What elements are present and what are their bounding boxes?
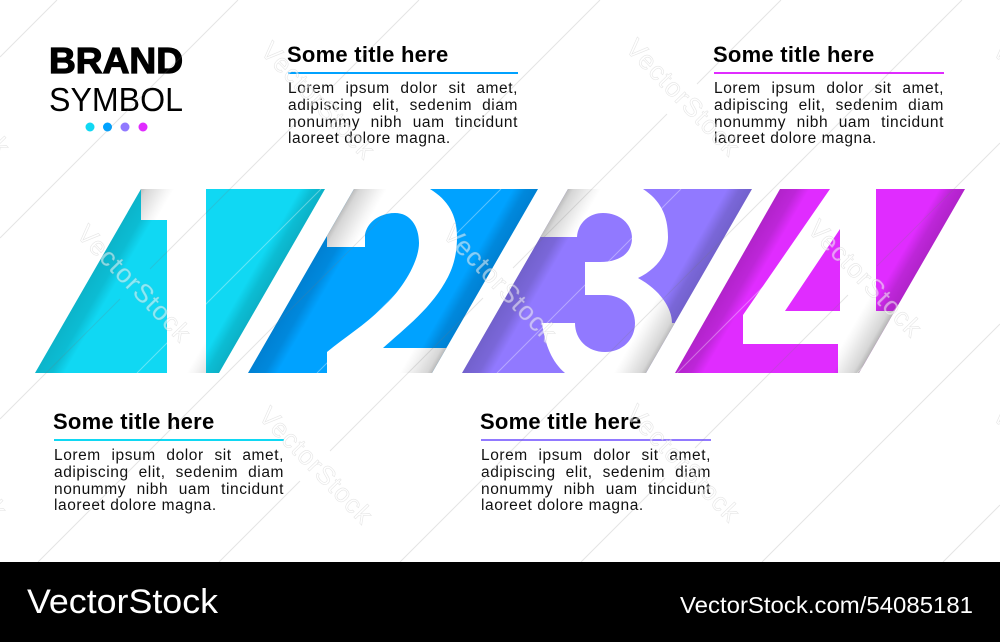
text block: top left: Lorem ipsum dolor sit amet,: [288, 80, 518, 97]
brand logo: [49, 40, 183, 132]
numbers graphic: [35, 189, 965, 373]
text block: bottom right: Some title here: [480, 409, 641, 434]
watermark overlay: VectorStock: [620, 399, 747, 528]
watermark overlay: VectorStock: [620, 33, 747, 162]
footer bar: [0, 562, 1000, 642]
brand logo: BRAND: [49, 40, 183, 81]
panel: number 2: [248, 189, 538, 373]
panel: number 1: [35, 189, 325, 373]
text block: bottom left: laoreet dolore magna.: [54, 497, 217, 514]
text block: top right: [713, 42, 944, 147]
brand logo: SYMBOL: [49, 81, 183, 118]
text block: top right: Some title here: [713, 42, 874, 67]
text block: top left: [287, 42, 518, 147]
footer bar: VectorStock.com/54085181: [680, 592, 973, 618]
text block: bottom right: laoreet dolore magna.: [481, 497, 644, 514]
text block: top left: adipiscing elit, sedenim diam: [288, 97, 518, 114]
text block: bottom right: Lorem ipsum dolor sit amet,: [481, 447, 711, 464]
text block: bottom left: nonummy nibh uam tincidunt: [54, 481, 284, 498]
text block: bottom left: adipiscing elit, sedenim diam: [54, 464, 284, 481]
text block: top left: Some title here: [287, 42, 448, 67]
text block: top left: nonummy nibh uam tincidunt: [288, 114, 518, 131]
watermark overlay: VectorStock: [71, 219, 198, 348]
text block: bottom left: Lorem ipsum dolor sit amet,: [54, 447, 284, 464]
watermark overlay: VectorStock: [253, 401, 380, 530]
text block: bottom right: nonummy nibh uam tincidunt: [481, 481, 711, 498]
panel: number 4: [675, 189, 965, 373]
text block: top left: laoreet dolore magna.: [288, 130, 451, 147]
watermark overlay: VectorStock: [255, 36, 382, 165]
text block: bottom right: adipiscing elit, sedenim diam: [481, 464, 711, 481]
text block: bottom right: [480, 409, 711, 514]
text block: top right: Lorem ipsum dolor sit amet,: [714, 80, 944, 97]
text block: top right: adipiscing elit, sedenim diam: [714, 97, 944, 114]
watermark overlay: VectorStock: [802, 214, 929, 343]
text block: top right: nonummy nibh uam tincidunt: [714, 114, 944, 131]
watermark overlay: VectorStock: [437, 219, 564, 348]
text block: bottom left: [53, 409, 284, 514]
text block: top right: laoreet dolore magna.: [714, 130, 877, 147]
text block: bottom left: Some title here: [53, 409, 214, 434]
panel: number 3: [462, 189, 752, 373]
footer bar: VectorStock: [27, 583, 219, 621]
